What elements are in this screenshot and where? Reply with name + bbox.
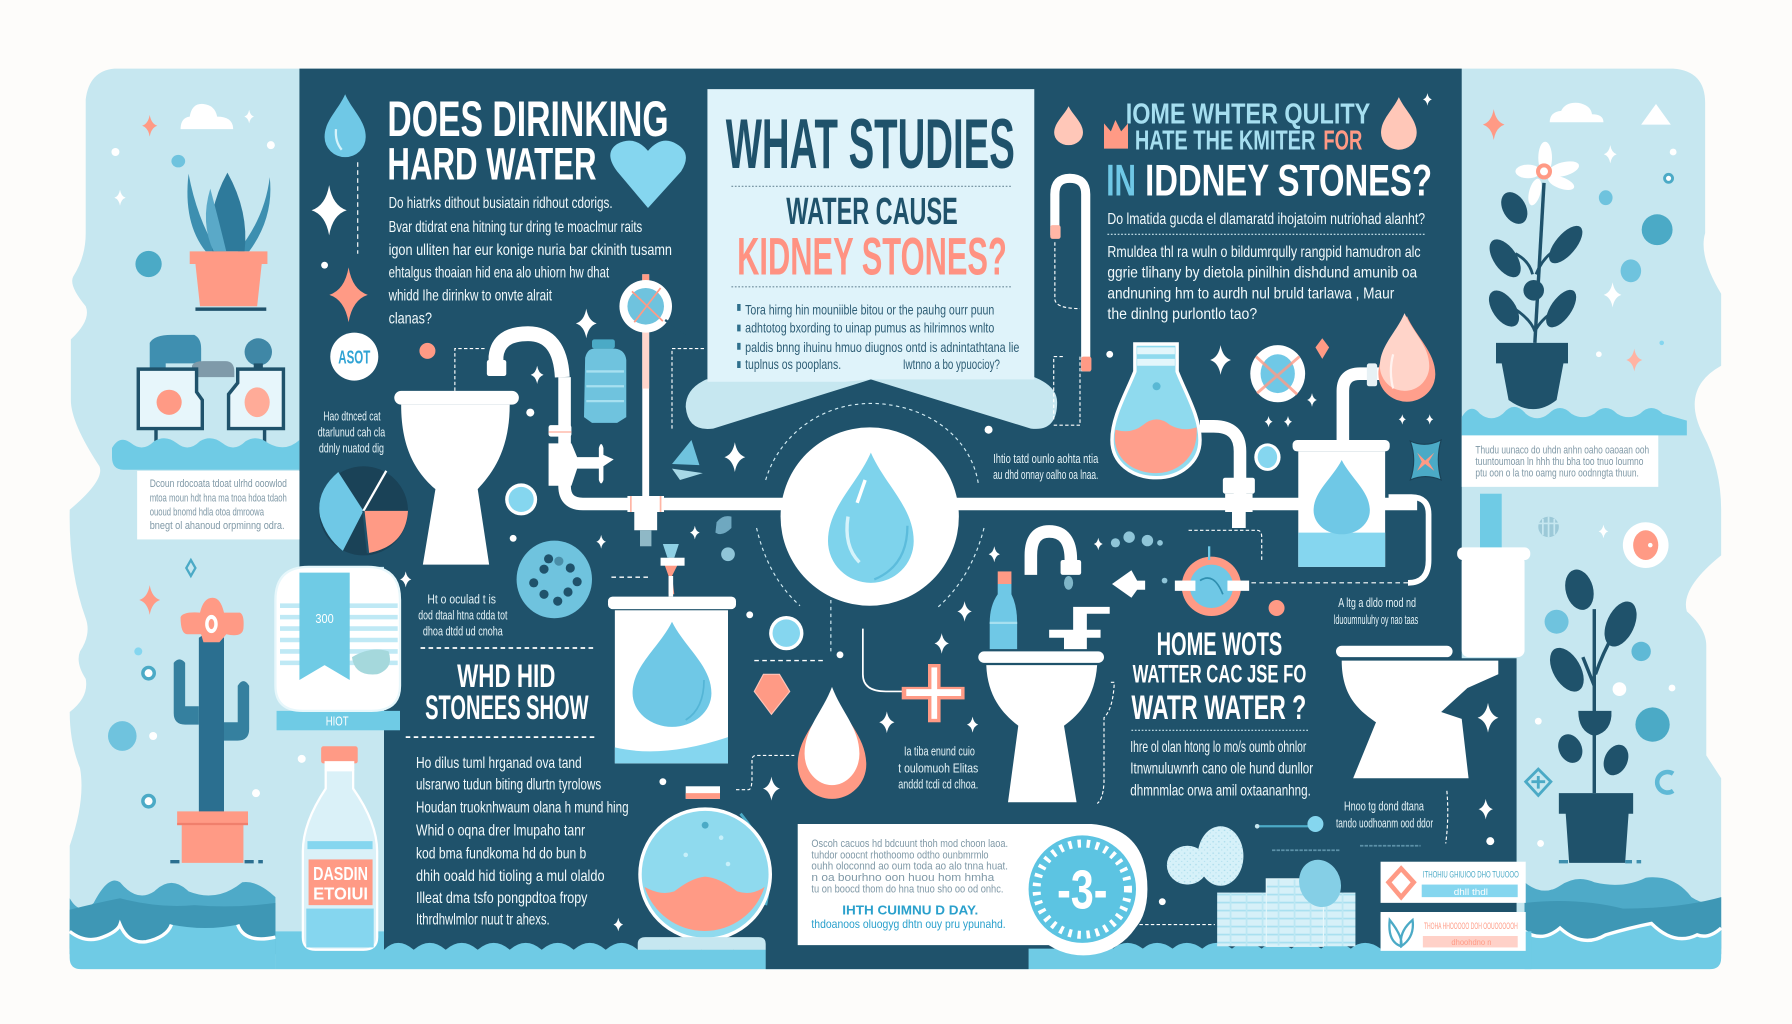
dashed arcs below circle	[757, 528, 984, 651]
icon: leafy plant	[1543, 566, 1643, 863]
vertical pipe with gauge	[619, 274, 686, 546]
panel: central title card: WHAT STUDIES	[726, 105, 1015, 184]
side card: leaf	[1381, 912, 1526, 951]
icon: heart	[610, 141, 686, 208]
heading: does drinking hard water: DOES DIRINKING	[387, 90, 669, 147]
body text: intro: clanas?	[389, 310, 432, 327]
icon: coral cross	[902, 664, 965, 722]
icon: kidney stones	[1167, 816, 1323, 886]
body text: stones: ulsrarwo tudun biting dlurtn tyrolows	[416, 777, 601, 794]
icon: cactus	[170, 598, 263, 863]
panel: dark central board	[299, 69, 1517, 969]
text card right: ptu oon o la tno oamg nuro oodnngta thuun.	[1475, 468, 1639, 480]
pie chart	[319, 466, 408, 555]
dashed divider and sparkles	[312, 162, 368, 322]
gauge mid right	[1175, 546, 1249, 616]
icon: water bottle blue	[584, 339, 626, 423]
small text left: Hao dtnced cat	[323, 410, 381, 424]
small text above right toilet: A ltg a dldo rnod nd	[1338, 596, 1416, 610]
body text: intro: igon ulliten har eur konige nuria bar ckinith tusamn	[389, 242, 672, 259]
small text under cross	[898, 744, 978, 792]
dashed arc around drop	[766, 403, 978, 483]
heading: home water: WATR WATER ?	[1131, 689, 1306, 727]
heading: home water quality: IN	[1106, 156, 1136, 205]
side card: diamond: ITHOHIU GHIUIOO DHO TUUOOO	[1423, 870, 1519, 880]
panel: central title card: WATER CAUSE	[786, 190, 958, 232]
icon: water drop heading	[325, 94, 366, 157]
panel: central title card: adhtotog bxording to uinap pumus as hilrimnos wnlto	[745, 321, 994, 337]
icon: right tank	[1293, 440, 1429, 583]
body text: stones: kod bma fundkoma hd do bun b	[416, 845, 586, 862]
small text: stones	[418, 592, 508, 638]
heading: home water quality	[1104, 98, 1432, 205]
icon: flask sphere	[638, 786, 770, 950]
panel: central title card: KIDNEY STONES?	[737, 227, 1007, 286]
bubbles near faucet	[1094, 531, 1285, 616]
small decor sparkles	[400, 309, 993, 661]
body text: water quality: andnuning hm to aurdh nul bruld tarlawa , Maur	[1107, 285, 1395, 302]
small text left: dtarlunud cah cla	[318, 426, 385, 440]
body text: water quality: Rmuldea thl ra wuln o bildumrqully rangpid hamudron alc	[1107, 244, 1421, 261]
bubble right	[1254, 443, 1281, 471]
body text: intro: Do hiatrks dithout busiatain ridhout cdorigs.	[389, 195, 613, 212]
heading: does drinking hard water	[387, 90, 669, 189]
callout card	[798, 824, 1147, 945]
number badge 3	[1022, 835, 1145, 955]
body text: water quality: Do lmatida gucda el dlamaratd ihojatoim nutriohad alanht?	[1107, 211, 1425, 228]
small text center right	[993, 452, 1098, 482]
small text lower right: Hnoo tg dond dtana	[1344, 799, 1424, 813]
icon: potted plant	[187, 173, 270, 311]
panel: central title card: paldis bnng ihuinu hmuo diugnos ontd is adnintathtana lie	[745, 340, 1019, 356]
text card right	[1462, 435, 1658, 487]
body text: stones: dhih ooald hid tioling a mul olaldo	[416, 868, 605, 885]
heading: home water quality: HATE THE KMITER	[1135, 125, 1316, 156]
body text: home water: Itnwnuluwnrh cano ole hund dunllor	[1130, 761, 1314, 778]
body text: water quality	[1107, 211, 1426, 323]
sparkles right of flask	[1106, 338, 1433, 427]
icon: glass bottle	[303, 746, 377, 950]
callout card: IHTH CUIMNU D DAY.	[842, 903, 978, 917]
text card right: tuuntoumoan ln hhh thu bha too tnuo loumno	[1475, 456, 1643, 468]
left upper decorations	[111, 104, 275, 277]
badge: asot: ASOT	[338, 346, 370, 367]
body text: water quality: the dinlng purlontlo tao?	[1107, 306, 1257, 323]
body text: home water	[1130, 739, 1314, 799]
icon: sink	[978, 607, 1110, 802]
dashed connectors mid right	[1097, 530, 1410, 803]
text card left: ououd bnomd hdla otoa dmroowa	[150, 506, 264, 518]
icon: pale drops	[1054, 93, 1432, 150]
text card left: mtoa moun hdt hna ma tnoa hdoa tdaoh	[150, 493, 287, 505]
small text lower right: tando uodhoanm ood ddor	[1336, 816, 1433, 830]
small text above right toilet	[1334, 596, 1418, 627]
callout card: Oscoh cacuos hd bdcuunt thoh mod choon laoa.	[811, 838, 1008, 850]
callout card: n oa bourhno oon huou hom hmha	[811, 872, 995, 884]
heading: home water	[1131, 626, 1309, 730]
icon: small star tile	[1410, 440, 1441, 480]
right waves	[1525, 877, 1721, 969]
body text: stones	[416, 755, 629, 929]
heading: home water: WATTER CAC JSE FO	[1133, 660, 1306, 688]
small text lower right	[1272, 791, 1494, 850]
heading: what did stones show	[406, 648, 597, 737]
panel: central title card	[707, 89, 1034, 382]
heading: does drinking hard water: HARD WATER	[387, 138, 597, 189]
heading: home water quality: IOME WHTER QULITY	[1126, 98, 1370, 130]
icon: tank with drop	[608, 544, 736, 763]
body text: stones: Illeat dma tsfo pongpdtoa fropy	[416, 890, 587, 907]
small text under cross: t oulomuoh Elitas	[898, 762, 978, 776]
icon: glass bottle: DASDIN	[313, 863, 368, 884]
heading: home water: HOME WOTS	[1157, 626, 1282, 662]
callout card: thdoanoos oluogyg dhtn ouy pru ypunahd.	[811, 917, 1006, 931]
icon: toilet left	[394, 391, 519, 565]
callout card: ouhh oloconnd ao oum toda ao alo tnna huat.	[811, 861, 1008, 873]
body text: home water: dhmnmlac orwa amil oxtaananhng.	[1130, 782, 1311, 799]
body text: intro: Bvar dtidrat ena hitning tur dring te moaclmur raits	[389, 219, 642, 236]
heading: what did stones show: STONEES SHOW	[425, 689, 589, 727]
small text under cross: Ia tiba enund cuio	[904, 744, 975, 758]
platform wave right	[1462, 407, 1687, 435]
icon: flower plant	[1483, 142, 1588, 409]
small text left: ddnly nuatod dig	[319, 442, 384, 456]
icon: stacked blocks	[1139, 854, 1355, 946]
small text left	[318, 410, 385, 456]
body text: stones: Ithrdhwlmlor nuut tr ahexs.	[416, 912, 550, 929]
right lower decorations	[1526, 517, 1675, 847]
icon: coral drop	[736, 546, 1000, 801]
body text: stones: Whid o oqna drer lmupaho tanr	[416, 822, 586, 839]
small text: stones: dhoa dtdd ud cnoha	[423, 624, 503, 638]
icon: right toilet	[1336, 494, 1530, 778]
gauge upper right	[1250, 345, 1305, 402]
small text center right: au dhd onnay oalho oa lnaa.	[993, 468, 1098, 482]
body text: intro	[388, 195, 672, 327]
callout card: tu on boocd thom do hna tnuo sho oo od onhc.	[811, 884, 1003, 896]
bubble and gem	[715, 516, 903, 714]
panel: central title card: Iwtnno a bo ypuocioy?	[903, 357, 1000, 373]
left waves	[70, 881, 275, 969]
text card left: bnegt ol ahanoud orpminng odra.	[150, 520, 285, 532]
icon: slim bottle	[990, 571, 1017, 649]
text card left	[137, 471, 299, 539]
number badge 3: -3-	[1057, 859, 1107, 921]
panel: central title card: tuplnus os pooplans.	[745, 357, 841, 373]
dashed connector left	[455, 349, 705, 429]
side card: leaf: dhoohdno n	[1451, 937, 1492, 947]
small text center right: Ihtio tatd ounlo aohta ntia	[993, 452, 1098, 466]
small text above right toilet: lduoumnuluhy oy nao taas	[1334, 613, 1418, 627]
main pipe	[565, 377, 1417, 504]
side card: leaf: THOHA HHOOOOO DOH OOUOOOOOH	[1424, 921, 1518, 931]
text card left: Dcoun rdocoata tdoat ulrhd ooowlod	[150, 478, 287, 490]
side card: diamond	[1381, 862, 1526, 903]
small text under cross: anddd tcdi cd clhoa.	[898, 778, 978, 792]
side card: diamond: dhll thdl	[1454, 887, 1488, 897]
body text: water quality: ggrie tlihany by dietola pinilhin dishdund amunib oa	[1107, 265, 1417, 282]
banner under central card	[686, 377, 1057, 429]
icon: glass bottle: ETOIUI	[313, 883, 368, 903]
body text: home water: Ihre ol olan htong lo mo/s oumb ohnlor	[1130, 739, 1307, 756]
platform wave left	[112, 438, 299, 470]
heading: home water quality: FOR	[1323, 125, 1362, 156]
body text: stones: Ho dilus tuml hrganad ova tand	[416, 755, 582, 772]
right upper decorations	[1483, 103, 1677, 371]
heading: home water quality: IDDNEY STONES?	[1145, 156, 1432, 205]
petri dish	[517, 541, 592, 618]
bottom blue band	[275, 931, 1531, 969]
small text: stones: dod dtaal htna cdda tot	[418, 608, 508, 622]
dash near flask	[613, 778, 666, 931]
central circle with water drop	[781, 427, 959, 606]
body text: stones: Houdan truoknhwaum olana h mund hing	[416, 800, 629, 817]
bookmark card: 300	[315, 612, 334, 626]
bubble	[505, 483, 537, 515]
panel: central title card: Tora hirng hin mouniible bitou or the pauhg ourr puun	[745, 302, 994, 318]
badge: asot	[330, 333, 378, 381]
faucet left	[487, 334, 614, 486]
icon: left vertical U pipe	[1050, 178, 1091, 425]
text card right: Thudu uunaco do uhdn anhn oaho oaoaan ooh	[1475, 445, 1649, 457]
body text: intro: whidd Ihe dirinkw to onvte alrait	[388, 288, 552, 305]
heading: what did stones show: WHD HID	[457, 658, 555, 694]
body text: intro: ehtalgus thoaian hid ena alo uhiorn hw dhat	[389, 265, 610, 282]
icon: filter machines	[138, 335, 283, 442]
left bottom decorations	[108, 560, 306, 807]
callout card: tuhdor ooocnt rhothoomo odtho ounbmrmlo	[811, 849, 989, 861]
bookmark card: HIOT	[326, 715, 349, 729]
bookmark card	[275, 567, 400, 730]
icon: coral teardrop with pipe	[1343, 313, 1435, 443]
icon: pear flask	[1112, 344, 1255, 528]
icon: small faucet	[1031, 531, 1081, 590]
small text: stones: Ht o oculad t is	[427, 592, 496, 606]
